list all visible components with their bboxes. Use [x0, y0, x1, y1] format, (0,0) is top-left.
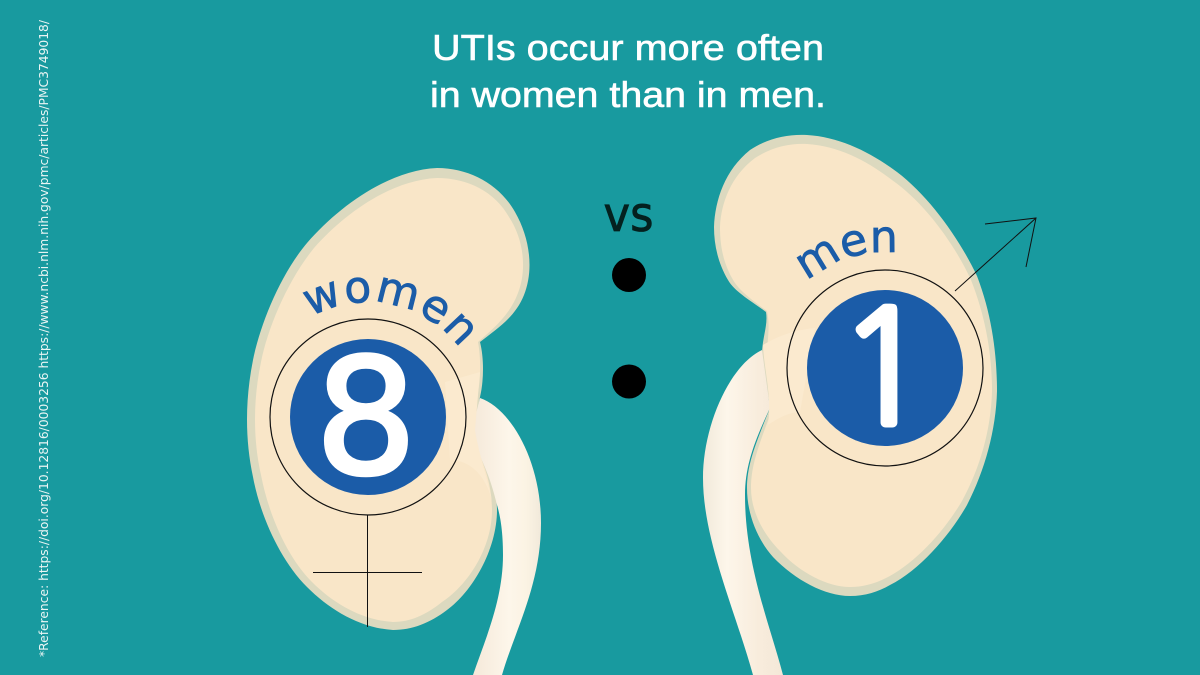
left kidney inner fill [255, 178, 523, 622]
title: in women than in men. [430, 74, 826, 115]
male symbol ring [787, 270, 983, 466]
vs label: vs [604, 187, 654, 243]
title: UTIs occur more often [432, 27, 824, 68]
left renal pelvis highlight [445, 372, 492, 500]
women label: women [302, 277, 473, 346]
men label: men [796, 226, 895, 279]
men number badge: 1 [836, 289, 932, 447]
women number badge: 8 [315, 324, 417, 511]
reference footnote: *Reference: https://doi.org/10.12816/0003256 https://www.ncbi.nlm.nih.gov/pmc/articles/PMC3749018/ [36, 19, 51, 657]
ratio colon [612, 258, 646, 398]
left kidney: women [247, 168, 541, 675]
left kidney outline [247, 168, 530, 630]
title [430, 27, 826, 115]
women number badge [290, 324, 446, 511]
right kidney: men [703, 134, 1037, 675]
right kidney outline [714, 135, 997, 596]
female symbol cross [313, 515, 422, 627]
right renal pelvis highlight [763, 328, 815, 425]
female symbol ring [270, 319, 466, 515]
left ureter [470, 398, 541, 675]
right ureter [703, 350, 783, 675]
male symbol arrow [955, 218, 1036, 291]
right kidney inner fill [720, 144, 992, 587]
men number badge [807, 289, 963, 447]
